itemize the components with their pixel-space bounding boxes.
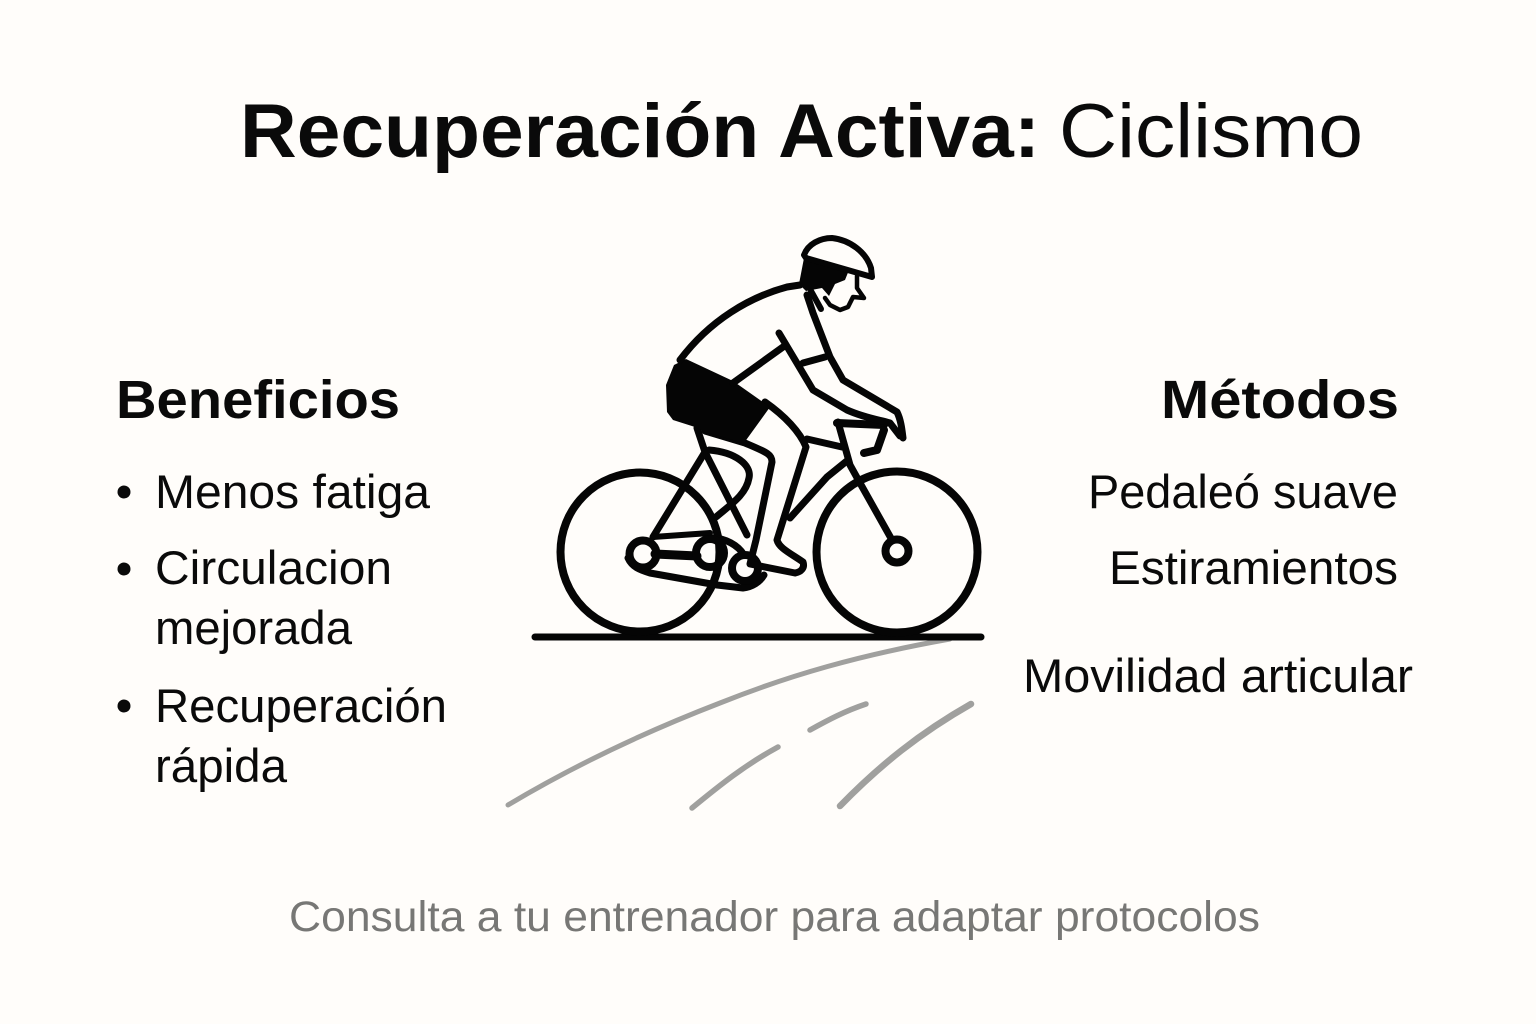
list: beneficios: rápida: [155, 739, 288, 792]
rider torso and arm: [680, 285, 903, 438]
illustration: cyclist on bicycle: [535, 238, 981, 637]
list: métodos: Movilidad articular: [1023, 649, 1413, 702]
illustration: road lines: [508, 639, 971, 808]
rider head: [799, 238, 872, 310]
heading: beneficios: Beneficios: [116, 370, 400, 430]
title: [240, 89, 1363, 174]
panel: beneficios: [116, 370, 447, 792]
helmet: [804, 238, 872, 277]
bicycle frame: [653, 422, 892, 540]
list: beneficios: Recuperación: [155, 679, 447, 732]
rider shorts: [666, 359, 770, 443]
front hub: [886, 540, 908, 562]
list: beneficios: Circulacion: [155, 541, 392, 594]
front wheel: [816, 472, 978, 632]
heading: métodos: Métodos: [1161, 370, 1399, 430]
title: Recuperación Activa:: [240, 89, 1040, 174]
list: beneficios: Menos fatiga: [155, 465, 431, 518]
list: métodos: [1023, 465, 1413, 702]
footer note: Consulta a tu entrenador para adaptar protocolos: [289, 893, 1260, 941]
ground line: [535, 634, 981, 640]
rider leg and shoe: [705, 402, 806, 573]
list: beneficios: mejorada: [155, 601, 353, 654]
title: Ciclismo: [1059, 89, 1363, 174]
chain and gears: [628, 533, 764, 588]
list: métodos: Estiramientos: [1109, 541, 1398, 594]
rear wheel: [560, 472, 720, 632]
panel: métodos: [1023, 370, 1413, 702]
list: beneficios: [118, 465, 447, 792]
list: métodos: Pedaleó suave: [1088, 465, 1398, 518]
